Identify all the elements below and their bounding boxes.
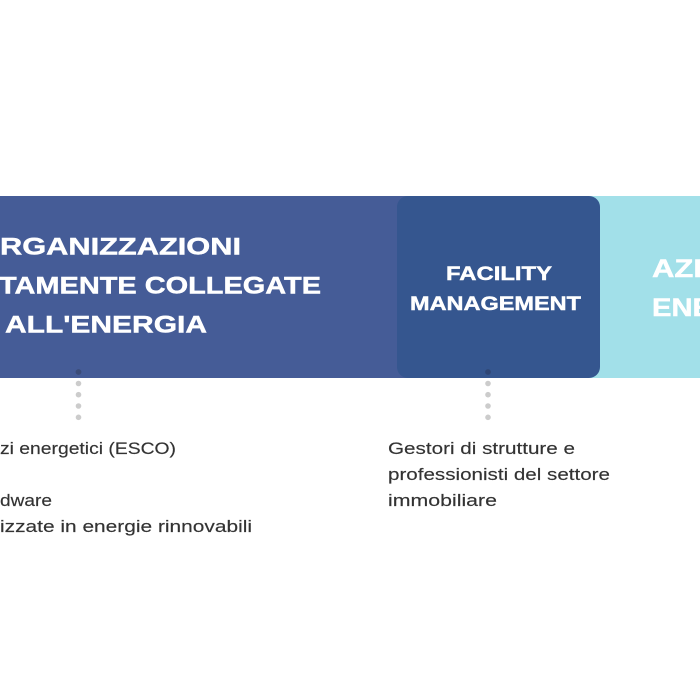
panel: aziende energetiche (580, 196, 700, 378)
dotted connector: facility management (485, 369, 491, 420)
heading: organizzazioni collegate all'energia: RGANIZZAZIONI (0, 234, 241, 260)
text block: organizzazioni list: izzate in energie rinnovabili (0, 518, 252, 536)
heading: aziende energetiche (652, 255, 700, 322)
heading: aziende energetiche: AZI (652, 255, 700, 283)
panel: organizzazioni collegate all'energia (0, 196, 410, 378)
text block: facility management description: immobiliare (388, 492, 497, 510)
heading: facility management: MANAGEMENT (410, 293, 581, 315)
text block: organizzazioni list: zi energetici (ESCO) (0, 440, 176, 458)
heading: organizzazioni collegate all'energia: ALL'ENERGIA (5, 312, 207, 338)
heading: facility management: FACILITY (446, 263, 552, 285)
text block: facility management description (388, 440, 610, 510)
text block: organizzazioni list: dware (0, 492, 52, 510)
panel: facility management (397, 196, 600, 378)
dotted connector: left (76, 369, 81, 420)
text block: facility management description: Gestori di strutture e (388, 440, 575, 458)
heading: facility management (410, 263, 581, 315)
heading: organizzazioni collegate all'energia (0, 234, 321, 338)
text block: facility management description: professionisti del settore (388, 466, 610, 484)
heading: organizzazioni collegate all'energia: TAMENTE COLLEGATE (0, 272, 321, 300)
text block: organizzazioni list (0, 440, 252, 536)
